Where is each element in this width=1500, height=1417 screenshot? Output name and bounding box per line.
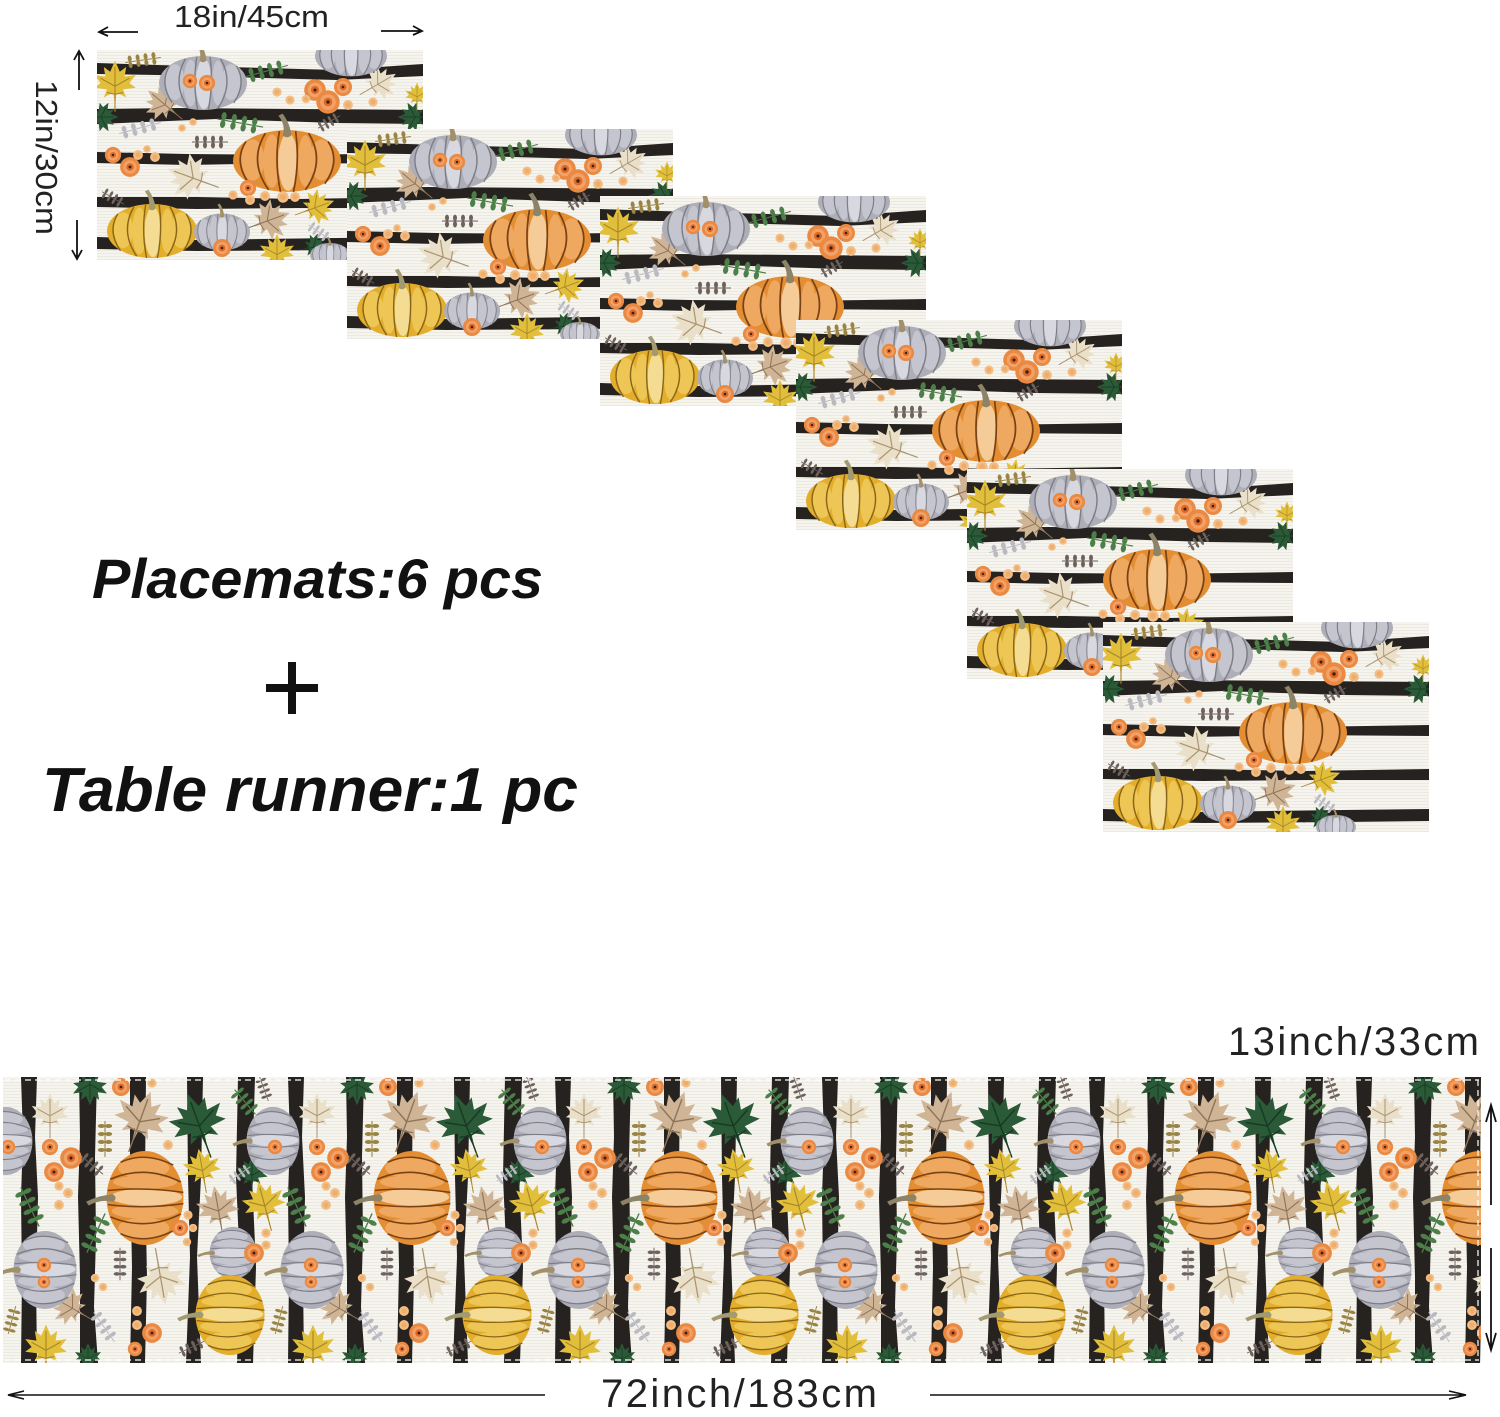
icon: plus sign: [266, 662, 318, 714]
arrow: runner length right: [930, 1391, 1466, 1399]
runner width label: 13inch/33cm: [1228, 1020, 1479, 1064]
arrow: runner height down: [1486, 1248, 1496, 1350]
runner length label: 72inch/183cm: [601, 1372, 877, 1416]
placemat 1: [83, 25, 433, 275]
arrow: runner height up: [1486, 1105, 1496, 1205]
heading: table runner count: Table runner:1 pc: [42, 756, 578, 825]
table runner: [0, 1064, 1500, 1376]
placemat stack: six overlapping placemats: [83, 25, 1439, 847]
placemat 2: [333, 104, 683, 354]
placemat 3: [586, 171, 936, 421]
placemat 4: [782, 295, 1132, 545]
placemat width label: 18in/45cm: [174, 0, 329, 34]
arrow: placemat height up: [74, 51, 84, 90]
placemat 6: [1089, 597, 1439, 847]
arrow: placemat height down: [72, 220, 82, 259]
arrow: placemat width right: [381, 26, 422, 35]
heading: placemats count: Placemats:6 pcs: [92, 547, 543, 610]
placemat 5: [953, 444, 1303, 694]
arrow: runner length left: [8, 1391, 545, 1399]
arrow: placemat width left: [99, 27, 138, 36]
placemat height label: 12in/30cm: [29, 80, 64, 235]
